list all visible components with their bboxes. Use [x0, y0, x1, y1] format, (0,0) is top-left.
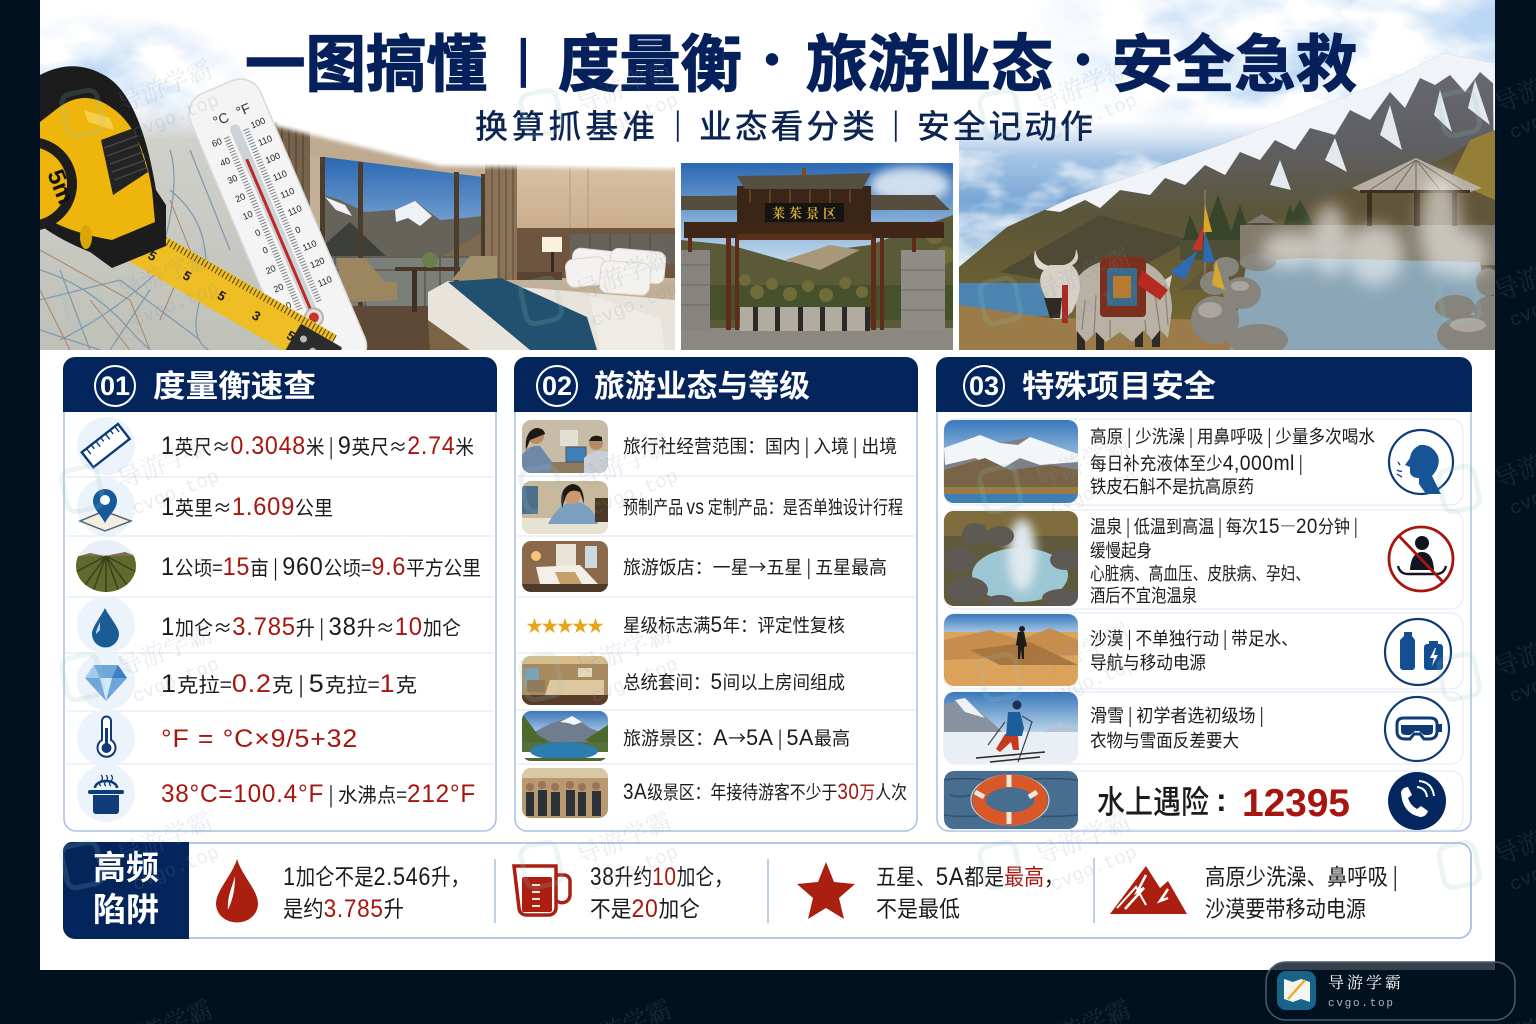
trap text: 38 liters: 38升约10加仑，	[590, 860, 733, 892]
icon: ski goggles	[1385, 697, 1449, 761]
row: hotel grade: 旅游饭店：一星→五星 | 五星最高	[623, 554, 887, 580]
text: plateau: 铁皮石斛不是抗高原药	[1090, 473, 1254, 499]
row: gallon: 1加仑≈3.785升 | 38升≈10加仑	[161, 612, 461, 641]
title	[245, 14, 1357, 104]
tape measure	[40, 66, 342, 350]
row: scenic grade: 旅游景区：A→5A | 5A最高	[623, 725, 850, 751]
row: star review: 星级标志满5年：评定性复核	[623, 612, 845, 638]
rocks	[1191, 253, 1506, 356]
trap text: plateau and desert: 沙漠要带移动电源	[1205, 892, 1366, 924]
thermometer: °F	[234, 100, 253, 120]
badge: 导游学霸	[1266, 962, 1515, 1020]
icon: water drop	[77, 596, 135, 654]
row: 3A visitors: 3A级景区：年接待游客不少于30万人次	[623, 779, 907, 805]
title: 度量衡	[558, 14, 742, 104]
panel: 度量衡速查	[63, 357, 497, 831]
blade: 5	[284, 328, 298, 344]
trap text: plateau and desert	[1205, 860, 1398, 924]
row: presidential suite: 总统套间：5间以上房间组成	[623, 669, 845, 695]
badge logo	[1277, 971, 1316, 1010]
text: hot spring: 缓慢起身	[1090, 537, 1152, 563]
title: 一图搞懂	[245, 14, 487, 104]
text: plateau: 高原 | 少洗澡 | 用鼻呼吸 | 少量多次喝水	[1090, 423, 1375, 449]
panel header 02: 旅游业态与等级	[594, 361, 810, 406]
text: hot spring: 心脏病、高血压、皮肤病、孕妇、	[1090, 560, 1310, 586]
panel: 高频陷阱	[63, 841, 1471, 939]
trap text: 38 liters	[590, 860, 733, 924]
thermometer: 0	[254, 227, 262, 238]
pavilion	[1240, 158, 1495, 265]
title: 旅游业态	[806, 14, 1053, 104]
thumb: hotel	[522, 541, 608, 592]
icon: no bathing	[1389, 527, 1453, 591]
trap text: 38 liters: 不是20加仑	[590, 892, 700, 924]
thumb: lifebuoy	[944, 771, 1078, 829]
row: hectare: 1公顷=15亩 | 960公顷=9.6平方公里	[161, 552, 481, 581]
thumb: skiing	[944, 692, 1078, 763]
icon: thermometer	[77, 709, 135, 767]
subtitle: |	[892, 103, 900, 143]
sky clouds right	[1054, 0, 1495, 126]
icon: nose breathing	[1389, 430, 1453, 494]
thermometer: 100	[249, 115, 267, 130]
panel header 01	[63, 357, 497, 412]
trap text: five star: 不是最低	[876, 892, 960, 924]
title: ·	[750, 25, 794, 89]
thermometer: 110	[279, 186, 296, 200]
icon: farm field	[76, 540, 136, 592]
text: hot spring	[1090, 513, 1358, 608]
thermometer: 120	[308, 255, 326, 270]
yak	[1034, 249, 1172, 350]
panel header 03	[936, 357, 1472, 412]
steam	[1262, 175, 1487, 285]
thumb: plateau	[944, 420, 1078, 503]
icon: red star	[797, 862, 855, 919]
blade	[128, 236, 342, 350]
room furniture	[337, 247, 675, 350]
thermometer: 30	[226, 173, 239, 186]
label block	[63, 841, 189, 939]
thermometer: °C	[210, 109, 231, 130]
thermometer: 110	[271, 168, 288, 183]
icon: five stars: ★★★★★	[526, 617, 604, 636]
text: plateau	[1090, 423, 1375, 499]
badge: 导游学霸: 导游学霸	[1328, 970, 1401, 993]
callout: water emergency: :	[1216, 782, 1227, 818]
thumb: visitors	[522, 768, 608, 818]
thumb: hot spring	[941, 511, 1082, 609]
row: feet: 1英尺≈0.3048米 | 9英尺≈2.74米	[161, 431, 474, 460]
label block: 高频	[93, 841, 159, 889]
blade: 5	[215, 288, 229, 304]
blade: 5	[180, 268, 194, 284]
thermometer: 110	[286, 203, 303, 218]
icon: phone	[1388, 772, 1446, 830]
thermometer: 10	[241, 209, 254, 222]
text: desert: 沙漠 | 不单独行动 | 带足水、	[1090, 625, 1298, 651]
row: temperature formula: °F = °C×9/5+32	[161, 725, 358, 753]
text: desert: 导航与移动电源	[1090, 649, 1206, 675]
text: skiing	[1090, 702, 1264, 753]
panel header 03: 特殊项目安全	[1022, 361, 1216, 406]
title: 安全急救	[1112, 14, 1357, 104]
thermometer: 20	[272, 281, 285, 295]
trap text: gallon: 1加仑不是2.546升，	[283, 860, 470, 892]
panel header 02: 02	[542, 371, 572, 401]
trees	[1183, 196, 1314, 240]
icon: ruler	[77, 417, 135, 475]
subtitle	[475, 100, 1093, 148]
hot spring pool	[1230, 258, 1495, 350]
trap text: five star: 五星、5A都是最高，	[876, 860, 1064, 892]
prayer flags	[1165, 190, 1225, 290]
row: agency scope: 旅行社经营范围：国内 | 入境 | 出境	[623, 433, 897, 459]
thermometer: 110	[256, 133, 274, 148]
subtitle: |	[674, 103, 682, 143]
icon: red drop	[216, 859, 258, 922]
row: carat: 1克拉=0.2克 | 5克拉=1克	[161, 669, 417, 698]
plateau scene photo	[959, 53, 1506, 356]
hotel top fade	[275, 118, 675, 169]
thermometer: 100	[264, 150, 282, 165]
gate sign: 莱茱景区	[772, 203, 836, 222]
icon: boiling pot	[77, 764, 135, 822]
thermometer: 10	[280, 300, 293, 313]
row: boiling point: 38°C=100.4°F | 水沸点=212°F	[161, 779, 476, 808]
trap text: plateau and desert: 高原少洗澡、鼻呼吸 |	[1205, 860, 1398, 892]
thermometer: 110	[316, 274, 333, 289]
icon: water bottle and power bank	[1385, 619, 1451, 685]
text: hot spring: 温泉 | 低温到高温 | 每次15—20分钟 |	[1090, 513, 1358, 539]
map under the tape	[40, 109, 282, 350]
callout: water emergency	[1097, 777, 1350, 825]
panel header 02	[514, 357, 918, 412]
thermometer: 20	[234, 191, 247, 204]
text: skiing: 衣物与雪面反差要大	[1090, 727, 1239, 753]
icon: diamond	[77, 652, 135, 710]
lake and ground	[959, 283, 1069, 316]
gate photo	[681, 163, 954, 350]
trap text: gallon	[283, 860, 470, 924]
panel: 旅游业态与等级	[514, 357, 918, 831]
blade: 5	[146, 248, 159, 264]
thermometer: 0	[261, 245, 269, 256]
row: product type: 预制产品 vs 定制产品：是否单独设计行程	[623, 494, 903, 520]
tape measure: 5m	[41, 166, 79, 208]
text: hot spring: 酒后不宜泡温泉	[1090, 582, 1197, 608]
trap text: gallon: 是约3.785升	[283, 892, 404, 924]
hotel room photo	[270, 118, 680, 353]
title: ·	[1061, 25, 1105, 89]
panel header 01: 01	[100, 371, 130, 401]
thumb: lake scenic area	[522, 711, 608, 761]
label block: 陷阱	[93, 883, 159, 931]
icon: map pin	[77, 478, 135, 536]
text: desert	[1090, 625, 1298, 675]
trap text: five star	[876, 860, 1064, 924]
subtitle: 安全记动作	[917, 100, 1093, 148]
icon: red mountains	[1110, 866, 1187, 914]
thermometer: 110	[301, 238, 318, 253]
panel: 特殊项目安全	[936, 357, 1472, 831]
thermometer: 60	[210, 136, 223, 149]
title: |	[517, 26, 530, 88]
callout: water emergency: 12395	[1242, 782, 1350, 825]
callout: water emergency: 水上遇险	[1097, 777, 1209, 823]
thermometer: 0	[294, 224, 302, 235]
thumb: suite	[522, 656, 608, 705]
thermometer: 40	[218, 155, 232, 168]
sky clouds left	[40, 20, 242, 128]
icon: measuring jug	[514, 866, 570, 915]
thumb: custom product	[522, 481, 608, 534]
panel header 03: 03	[969, 371, 999, 401]
row: mile: 1英里≈1.609公里	[161, 492, 333, 521]
thermometer: 20	[264, 263, 277, 276]
thumb: desert	[944, 614, 1078, 686]
badge: 导游学霸: cvgo.top	[1328, 998, 1393, 1010]
thermometer	[188, 78, 368, 350]
subtitle: 业态看分类	[699, 100, 875, 148]
subtitle: 换算抓基准	[475, 100, 655, 148]
text: skiing: 滑雪 | 初学者选初级场 |	[1090, 702, 1264, 728]
blade: 3	[249, 308, 263, 324]
panel header 01: 度量衡速查	[153, 361, 316, 406]
hero banner	[40, 0, 1495, 350]
text: plateau: 每日补充液体至少4,000ml |	[1090, 450, 1303, 476]
thumb: travel agency	[522, 420, 608, 473]
